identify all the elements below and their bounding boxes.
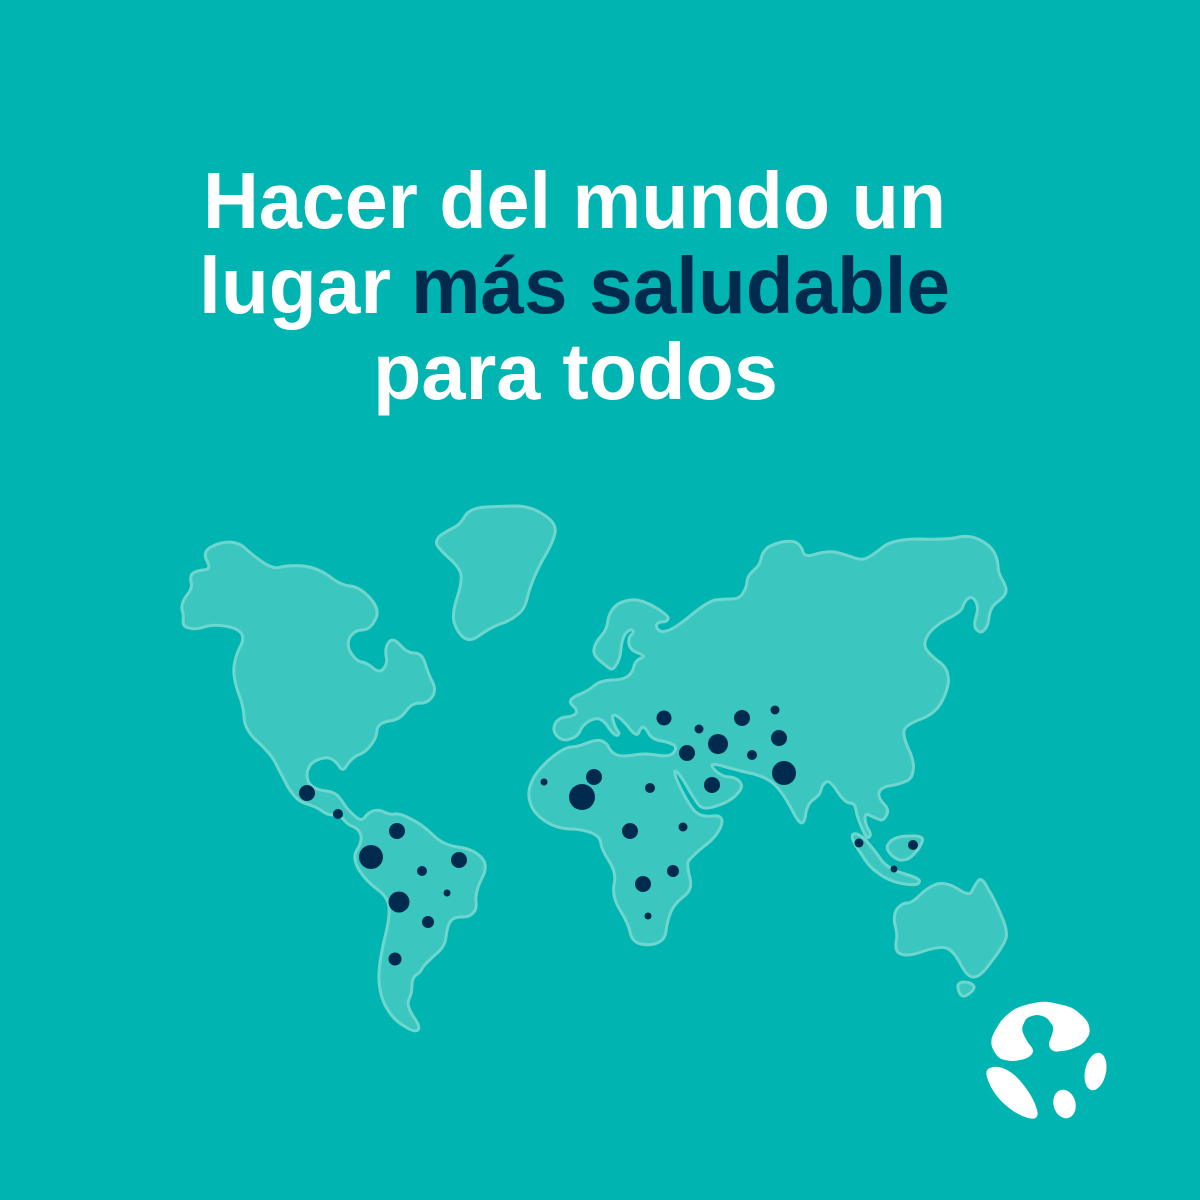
dots: Latin America — [299, 785, 467, 966]
title — [199, 156, 950, 416]
title line 1: Hacer del mundo un — [203, 156, 946, 245]
continents: Africa and Eurasia — [529, 536, 1006, 945]
world map — [182, 506, 1006, 1031]
dots: Southeast Asia — [854, 838, 918, 872]
data dots — [299, 706, 918, 966]
title line 2 white part: lugar — [199, 241, 391, 330]
continent: Americas — [182, 542, 485, 1031]
dots: Africa — [540, 769, 688, 920]
dots: Middle East and South Asia — [656, 706, 796, 793]
logo — [986, 1002, 1110, 1121]
title line 2 highlighted part: más saludable — [411, 241, 950, 330]
island: Sumatra and Java — [852, 834, 919, 885]
island: Greenland — [436, 506, 555, 640]
logo: small petal — [1050, 1087, 1079, 1121]
continent: Australia — [894, 880, 1006, 977]
island: Borneo — [887, 836, 922, 860]
logo: top horseshoe — [991, 1002, 1090, 1061]
title line 3: para todos — [373, 327, 778, 416]
logo: right petal — [1081, 1051, 1110, 1092]
island: Tasmania — [958, 982, 974, 996]
logo: left petal — [986, 1067, 1038, 1119]
